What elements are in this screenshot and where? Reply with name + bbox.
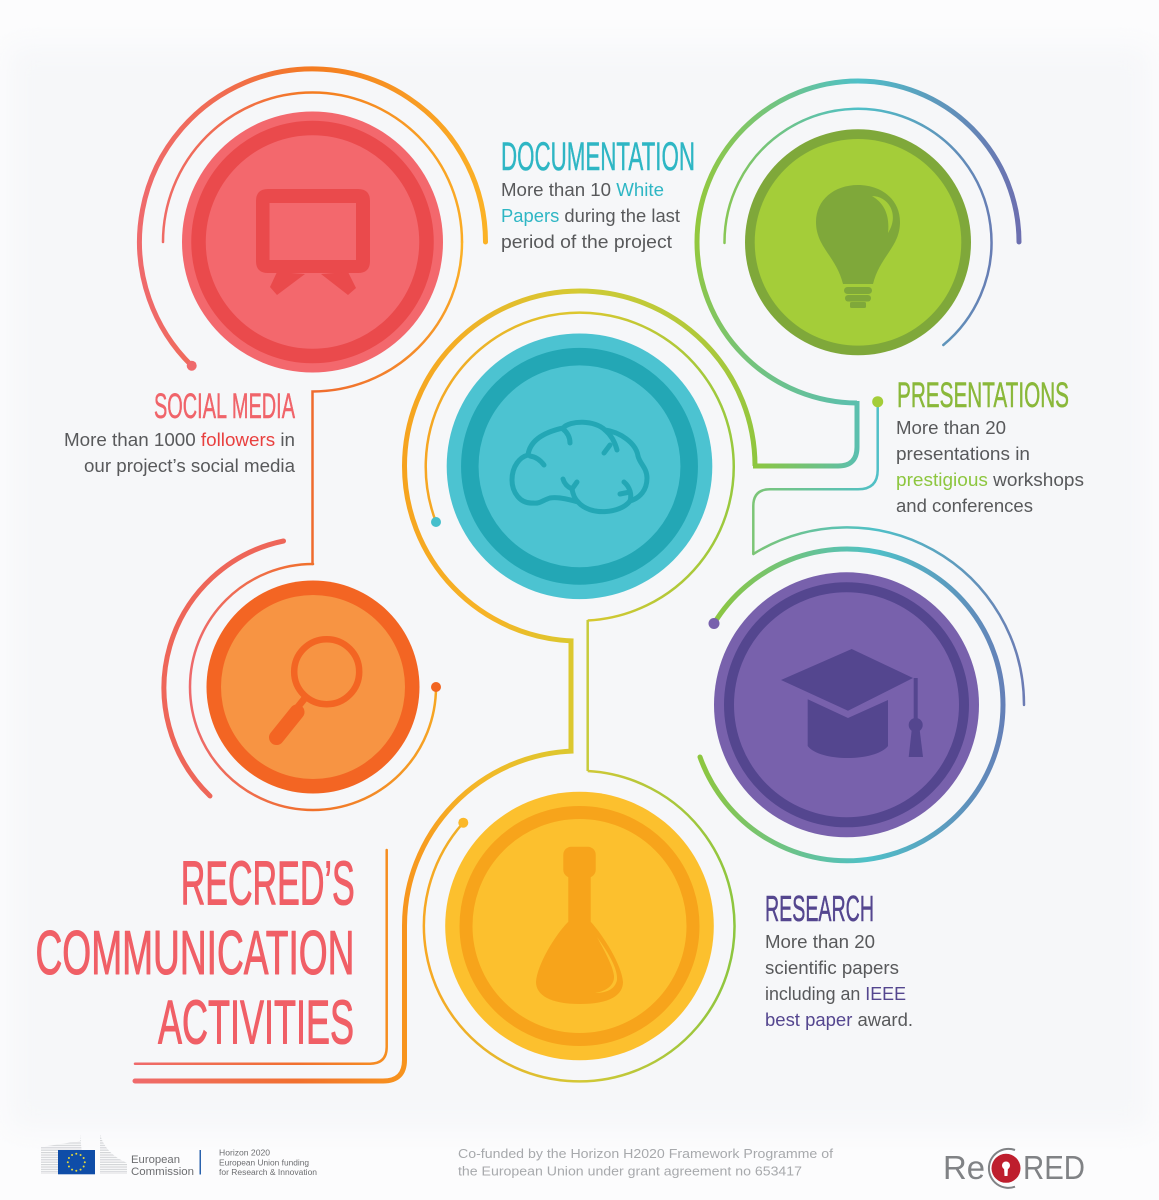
heading and description: presentations <box>896 376 1084 516</box>
heading and description: social media <box>64 387 296 476</box>
title thick underline <box>135 926 404 1081</box>
EU stars <box>67 1153 86 1172</box>
panel: research <box>700 396 1024 1030</box>
icon: flask <box>536 847 623 1004</box>
heading and description: social media: our project’s social media <box>84 456 296 476</box>
orange thick arc <box>164 541 284 796</box>
footer: ReCRED logo: RED <box>1023 1149 1085 1186</box>
footer: ReCRED logo <box>943 1149 1085 1188</box>
purple end dot <box>708 618 720 629</box>
footer: funding statement <box>458 1146 833 1179</box>
red ring <box>198 128 426 356</box>
green dot <box>872 396 883 407</box>
panel: laboratory <box>135 751 735 1081</box>
heading and description: presentations: and conferences <box>896 496 1033 516</box>
title: ACTIVITIES <box>158 988 354 1057</box>
yellow circle <box>445 792 714 1060</box>
heading and description: presentations: prestigious workshops <box>896 470 1084 490</box>
heading and description: social media: More than 1000 followers in <box>64 430 295 450</box>
red end dot <box>187 361 197 371</box>
C arc <box>989 1149 1015 1188</box>
yellow thin arc <box>424 771 735 1081</box>
footer: European Commission logo: Horizon 2020 <box>219 1149 271 1158</box>
purple circle <box>714 572 979 837</box>
title: COMMUNICATION <box>36 919 354 988</box>
footer: ReCRED logo: Re <box>943 1149 985 1186</box>
heading and description: research: RESEARCH <box>765 888 874 929</box>
connector arc to search <box>312 242 462 564</box>
orange end dot <box>431 682 441 692</box>
panel: documentation <box>404 135 755 771</box>
orange circle <box>206 580 420 794</box>
orange thin arc <box>190 564 436 810</box>
cyan circle <box>447 334 712 599</box>
red keyhole <box>992 1154 1020 1183</box>
icon: presentation board <box>256 189 370 295</box>
green thick arc <box>697 81 1019 242</box>
heading and description: research: scientific papers <box>765 958 899 978</box>
connector to documentation arc <box>753 401 857 466</box>
heading and description: presentations: presentations in <box>896 444 1030 464</box>
green thin arc <box>724 109 991 345</box>
red circle <box>182 112 443 372</box>
icon: graduation cap <box>781 649 923 758</box>
footer: funding statement: Co-funded by the Horizon H2020 Framework Programme of <box>458 1146 833 1161</box>
heading and description: documentation: DOCUMENTATION <box>501 135 695 179</box>
title: RECRED’S <box>181 849 355 918</box>
panel: presentations <box>697 81 1084 516</box>
footer: European Commission logo: European <box>131 1154 180 1166</box>
green circle <box>745 129 971 355</box>
heading and description: documentation: Papers during the last <box>501 206 680 226</box>
cyan thick arc <box>580 291 755 466</box>
heading and description: presentations: More than 20 <box>896 418 1006 438</box>
cyan end dot <box>431 517 441 527</box>
panel: search <box>164 541 441 810</box>
title <box>36 849 355 1057</box>
footer: European Commission logo: European Union funding <box>219 1158 309 1167</box>
yellow connector <box>568 639 574 754</box>
panel: social media <box>64 69 486 564</box>
footer: European Commission logo <box>41 1134 317 1178</box>
heading and description: documentation: period of the project <box>501 232 672 252</box>
yellow end dot <box>458 818 468 828</box>
icon: magnifying glass <box>276 639 359 738</box>
heading and description: research: including an IEEE <box>765 984 906 1004</box>
title thin underline <box>135 850 387 1064</box>
heading and description: documentation: More than 10 White <box>501 180 664 200</box>
yellow thick arc <box>404 751 574 926</box>
EU flag <box>58 1150 95 1174</box>
heading and description: social media: SOCIAL MEDIA <box>154 387 295 426</box>
footer: European Commission logo: for Research & Innovation <box>219 1168 317 1177</box>
heading and description: research: best paper award. <box>765 1010 913 1030</box>
purple thin arc <box>753 527 1024 705</box>
footer: European Commission logo: Commission <box>131 1166 194 1178</box>
red thin arc <box>163 92 462 242</box>
purple connector line <box>753 402 878 554</box>
icon: light bulb <box>816 185 900 308</box>
cyan thin arc <box>426 313 734 620</box>
heading and description: research: More than 20 <box>765 932 875 952</box>
heading and description: research <box>765 888 913 1030</box>
thin connector <box>586 620 589 771</box>
icon: brain <box>512 422 647 512</box>
red thick arc <box>140 69 486 366</box>
purple thick arc <box>714 549 1003 705</box>
heading and description: documentation <box>501 135 695 252</box>
building stripes <box>41 1134 127 1174</box>
footer: funding statement: the European Union under grant agreement no 653417 <box>458 1164 802 1179</box>
